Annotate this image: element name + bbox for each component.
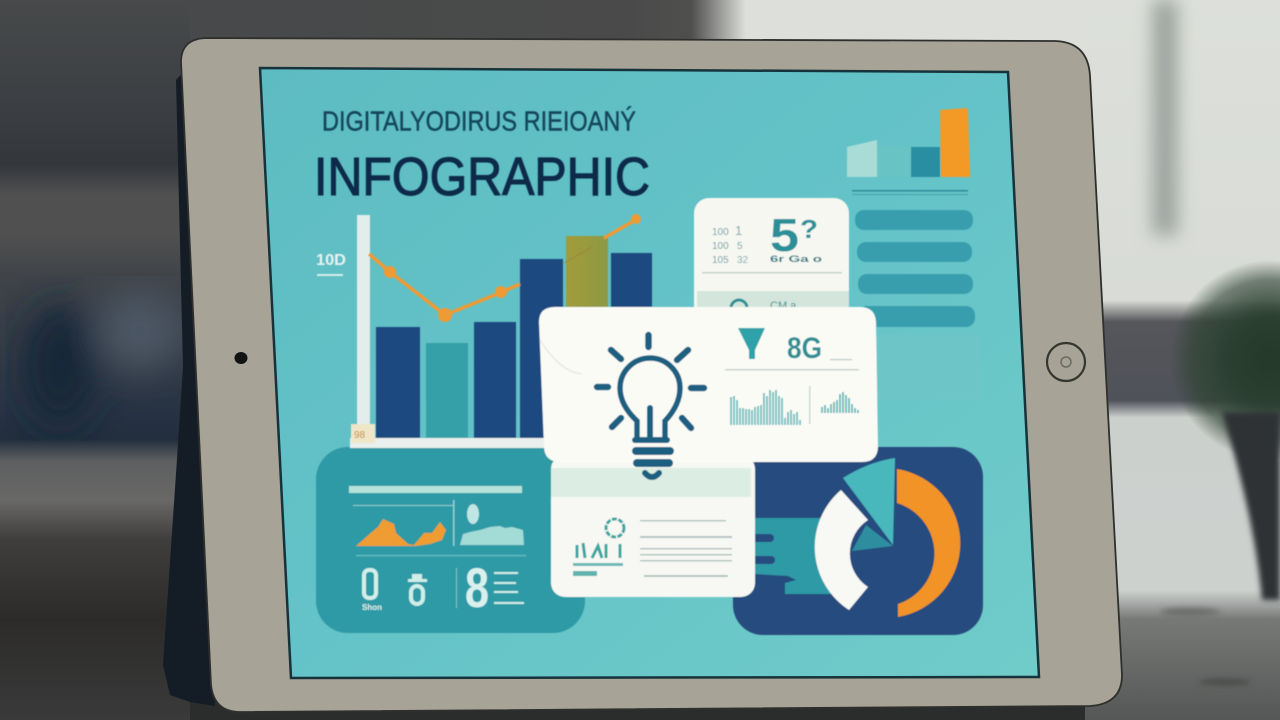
panel: navy donut (733, 447, 983, 635)
mini chart (822, 392, 858, 413)
card: top data: 100 (712, 241, 729, 252)
home button (1047, 343, 1085, 381)
panel: main idea card (539, 307, 878, 477)
card: top data: CM a (770, 300, 797, 312)
donut orange (897, 469, 960, 617)
tablet stand (163, 70, 215, 706)
panel: main idea card: 8G (787, 332, 822, 365)
area chart pale (460, 526, 524, 545)
subtitle: DIGITALYODIRUS RIEIOANÝ (322, 106, 636, 136)
donut white (815, 490, 868, 610)
area chart orange (356, 519, 446, 546)
camera dot (234, 352, 248, 364)
icon: person left (364, 570, 376, 598)
mini histogram (731, 390, 800, 425)
list rows (855, 210, 975, 327)
card: top data: 1 (735, 223, 742, 238)
card: top data: 105 (712, 255, 729, 266)
tablet bezel (181, 38, 1122, 712)
icon: people with wreath (577, 519, 624, 558)
tablet screen (260, 68, 1039, 678)
card: top data (694, 198, 849, 323)
funnel icon (738, 328, 765, 359)
bar chart with trend line (316, 214, 652, 448)
card: top data: 100 (712, 227, 729, 238)
panel: teal dashboard (316, 447, 585, 633)
donut teal wedge (843, 458, 895, 545)
tablet (163, 38, 1122, 712)
card: top data: 6r Ga o (770, 254, 823, 264)
text lines (640, 520, 732, 577)
mini bars top right (847, 108, 970, 195)
title: INFOGRAPHIC (314, 147, 650, 207)
card: top data: 5 (770, 209, 799, 261)
panel: lower card (551, 455, 755, 597)
icon: person hat (408, 574, 427, 604)
big figure 8: 8 (465, 556, 489, 619)
card: top data: ? (800, 214, 818, 244)
panel: teal dashboard: Shon (362, 603, 382, 612)
card: top data: 5 (737, 241, 743, 252)
faint panel right (875, 335, 980, 400)
card: top data: 32 (737, 255, 749, 266)
bar chart with trend line: 10D (316, 252, 346, 269)
bar chart with trend line: 98 (354, 430, 366, 441)
teal swoosh (755, 518, 835, 594)
icon: light bulb (597, 335, 704, 477)
